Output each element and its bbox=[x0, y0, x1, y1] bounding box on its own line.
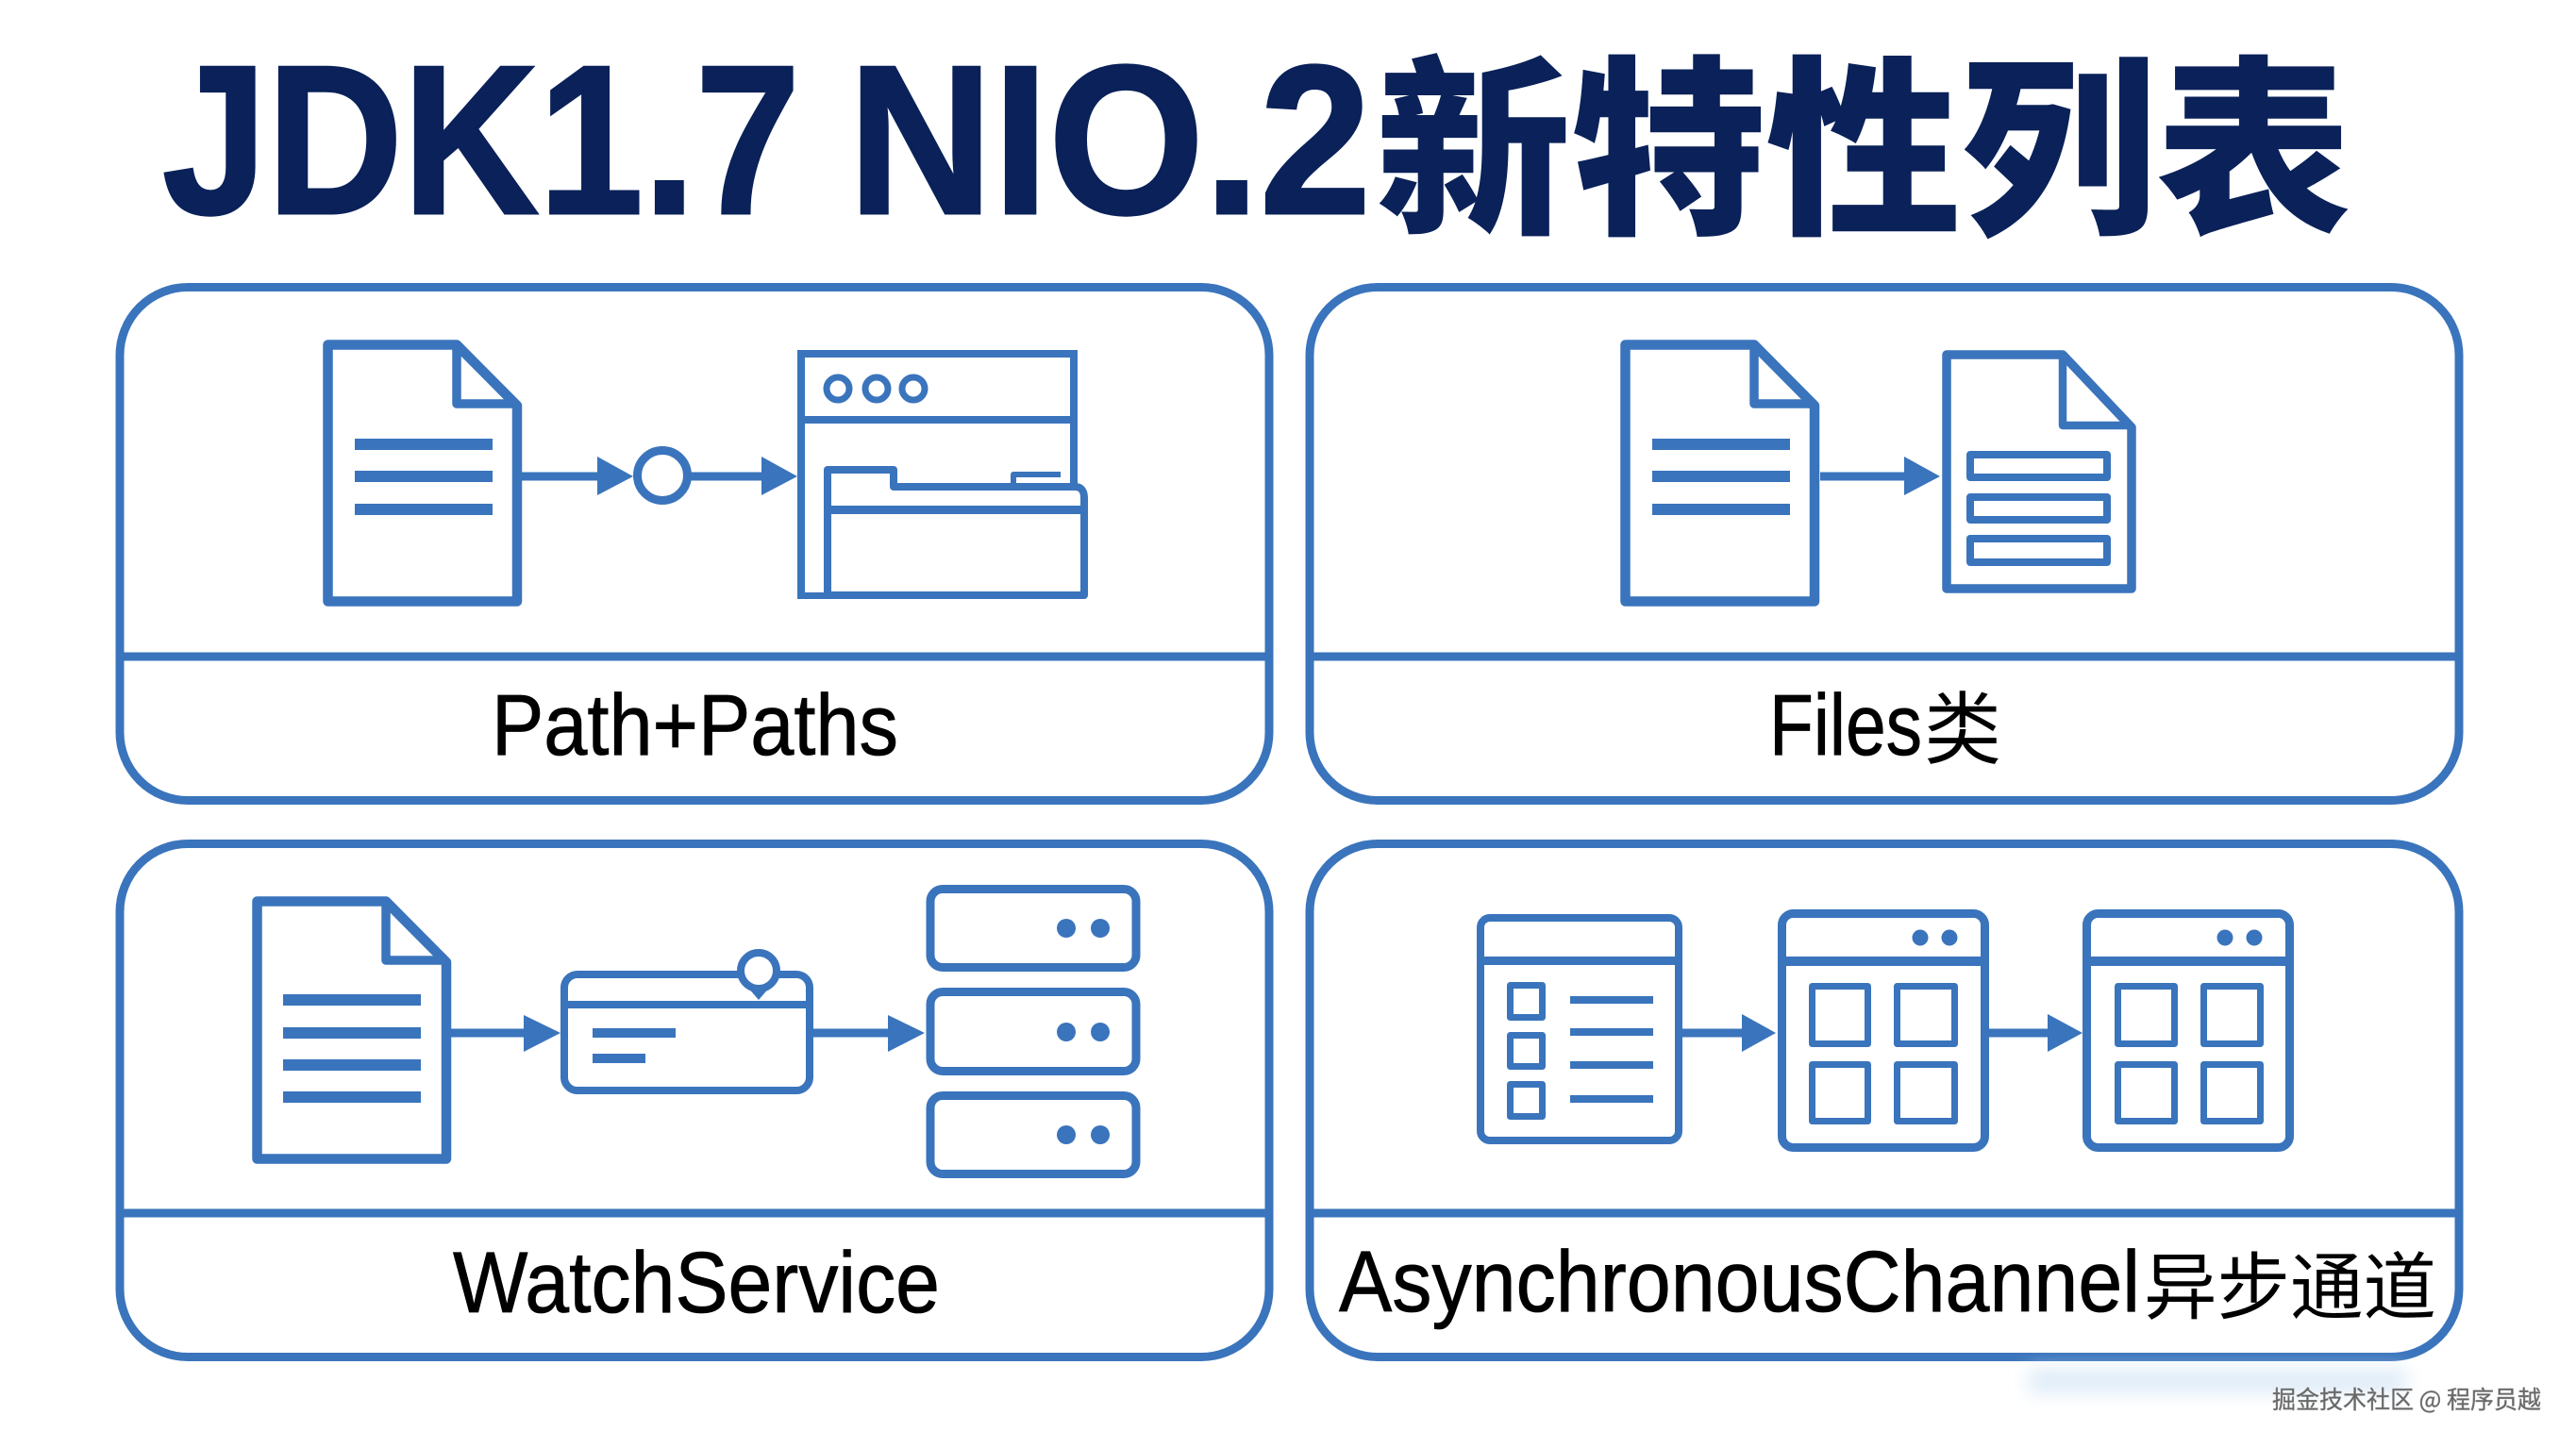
icon: server stack bbox=[930, 889, 1136, 1173]
watermark smudge bbox=[2029, 1370, 2406, 1392]
title: NIO.2 bbox=[848, 21, 1371, 258]
title: JDK1.7 bbox=[162, 21, 800, 258]
label: Files类: Files bbox=[1769, 677, 1922, 774]
arrow: watcher to servers bbox=[813, 1015, 925, 1052]
icon: path node circle bbox=[638, 451, 687, 500]
panel frame bbox=[120, 287, 1269, 800]
icon: list window bbox=[1477, 918, 1682, 1140]
icon: document bbox=[1625, 345, 1815, 602]
arrow: list window to grid window bbox=[1682, 1014, 1776, 1052]
panel frame bbox=[120, 843, 1269, 1356]
icon: watcher card with pin bbox=[564, 953, 810, 1090]
arrow: document to watcher bbox=[451, 1015, 560, 1052]
title bbox=[162, 0, 2351, 275]
label: WatchService: WatchService bbox=[453, 1235, 940, 1331]
arrow: node to folder window bbox=[691, 457, 797, 495]
panel frame bbox=[1310, 843, 2459, 1356]
label: AsynchronousChannel异步通道: 异步通道 bbox=[2144, 1246, 2436, 1329]
icon: structured document bbox=[1947, 355, 2132, 589]
panel frame bbox=[1310, 287, 2459, 800]
arrow: document to document bbox=[1820, 457, 1940, 495]
arrow: grid window to grid window bbox=[1989, 1014, 2083, 1052]
icon: second grid window bbox=[2083, 913, 2294, 1147]
label: Path+Paths: Path+Paths bbox=[492, 677, 898, 774]
panel: AsynchronousChannel bbox=[1310, 843, 2459, 1356]
icon: document bbox=[257, 902, 446, 1158]
panel: Path+Paths bbox=[120, 287, 1269, 800]
title: 新特性列表 bbox=[1376, 0, 2351, 275]
panel: Files bbox=[1310, 287, 2459, 800]
icon: document bbox=[328, 345, 517, 602]
panel: WatchService bbox=[120, 843, 1269, 1356]
label: AsynchronousChannel异步通道: AsynchronousChannel bbox=[1339, 1234, 2140, 1330]
icon: grid window bbox=[1778, 913, 1989, 1147]
icon: window with folder bbox=[797, 350, 1088, 599]
watermark: 掘金技术社区 @ 程序员越 bbox=[2272, 1381, 2541, 1416]
arrow: document to node bbox=[522, 457, 633, 495]
label: Files类: 类 bbox=[1924, 686, 2001, 774]
